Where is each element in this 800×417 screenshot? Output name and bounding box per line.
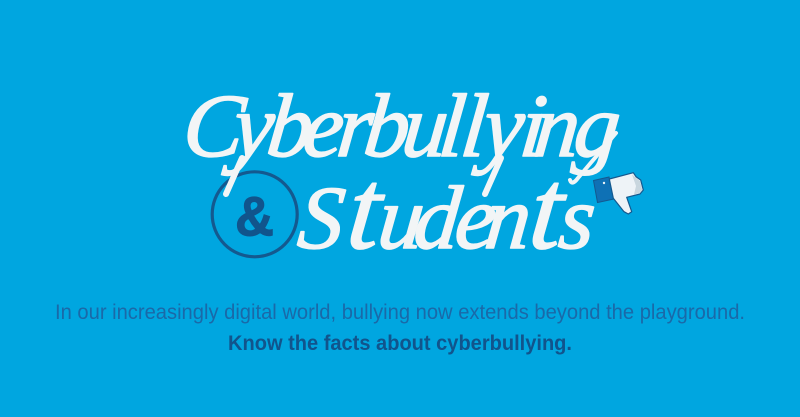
title: Students: s (555, 168, 600, 268)
thumb knuckle shade (632, 174, 642, 194)
thumb hand (609, 173, 643, 214)
title: Students: S (294, 168, 349, 268)
title: Students: uden (374, 168, 536, 268)
title: Cyberbullying: Cyberbullying (179, 76, 625, 176)
ampersand badge: & (235, 184, 274, 248)
call to action text: Know the facts about cyberbullying. (228, 332, 572, 355)
ampersand badge (212, 172, 297, 257)
intro text: In our increasingly digital world, bullying now extends beyond the playground. (55, 301, 745, 324)
icon: thumbs down (594, 173, 643, 214)
title: Students: t (524, 145, 573, 273)
title flourishes (226, 133, 616, 194)
title: Students (293, 145, 603, 273)
title: Students: t (342, 145, 391, 273)
thumb cuff (594, 177, 614, 202)
